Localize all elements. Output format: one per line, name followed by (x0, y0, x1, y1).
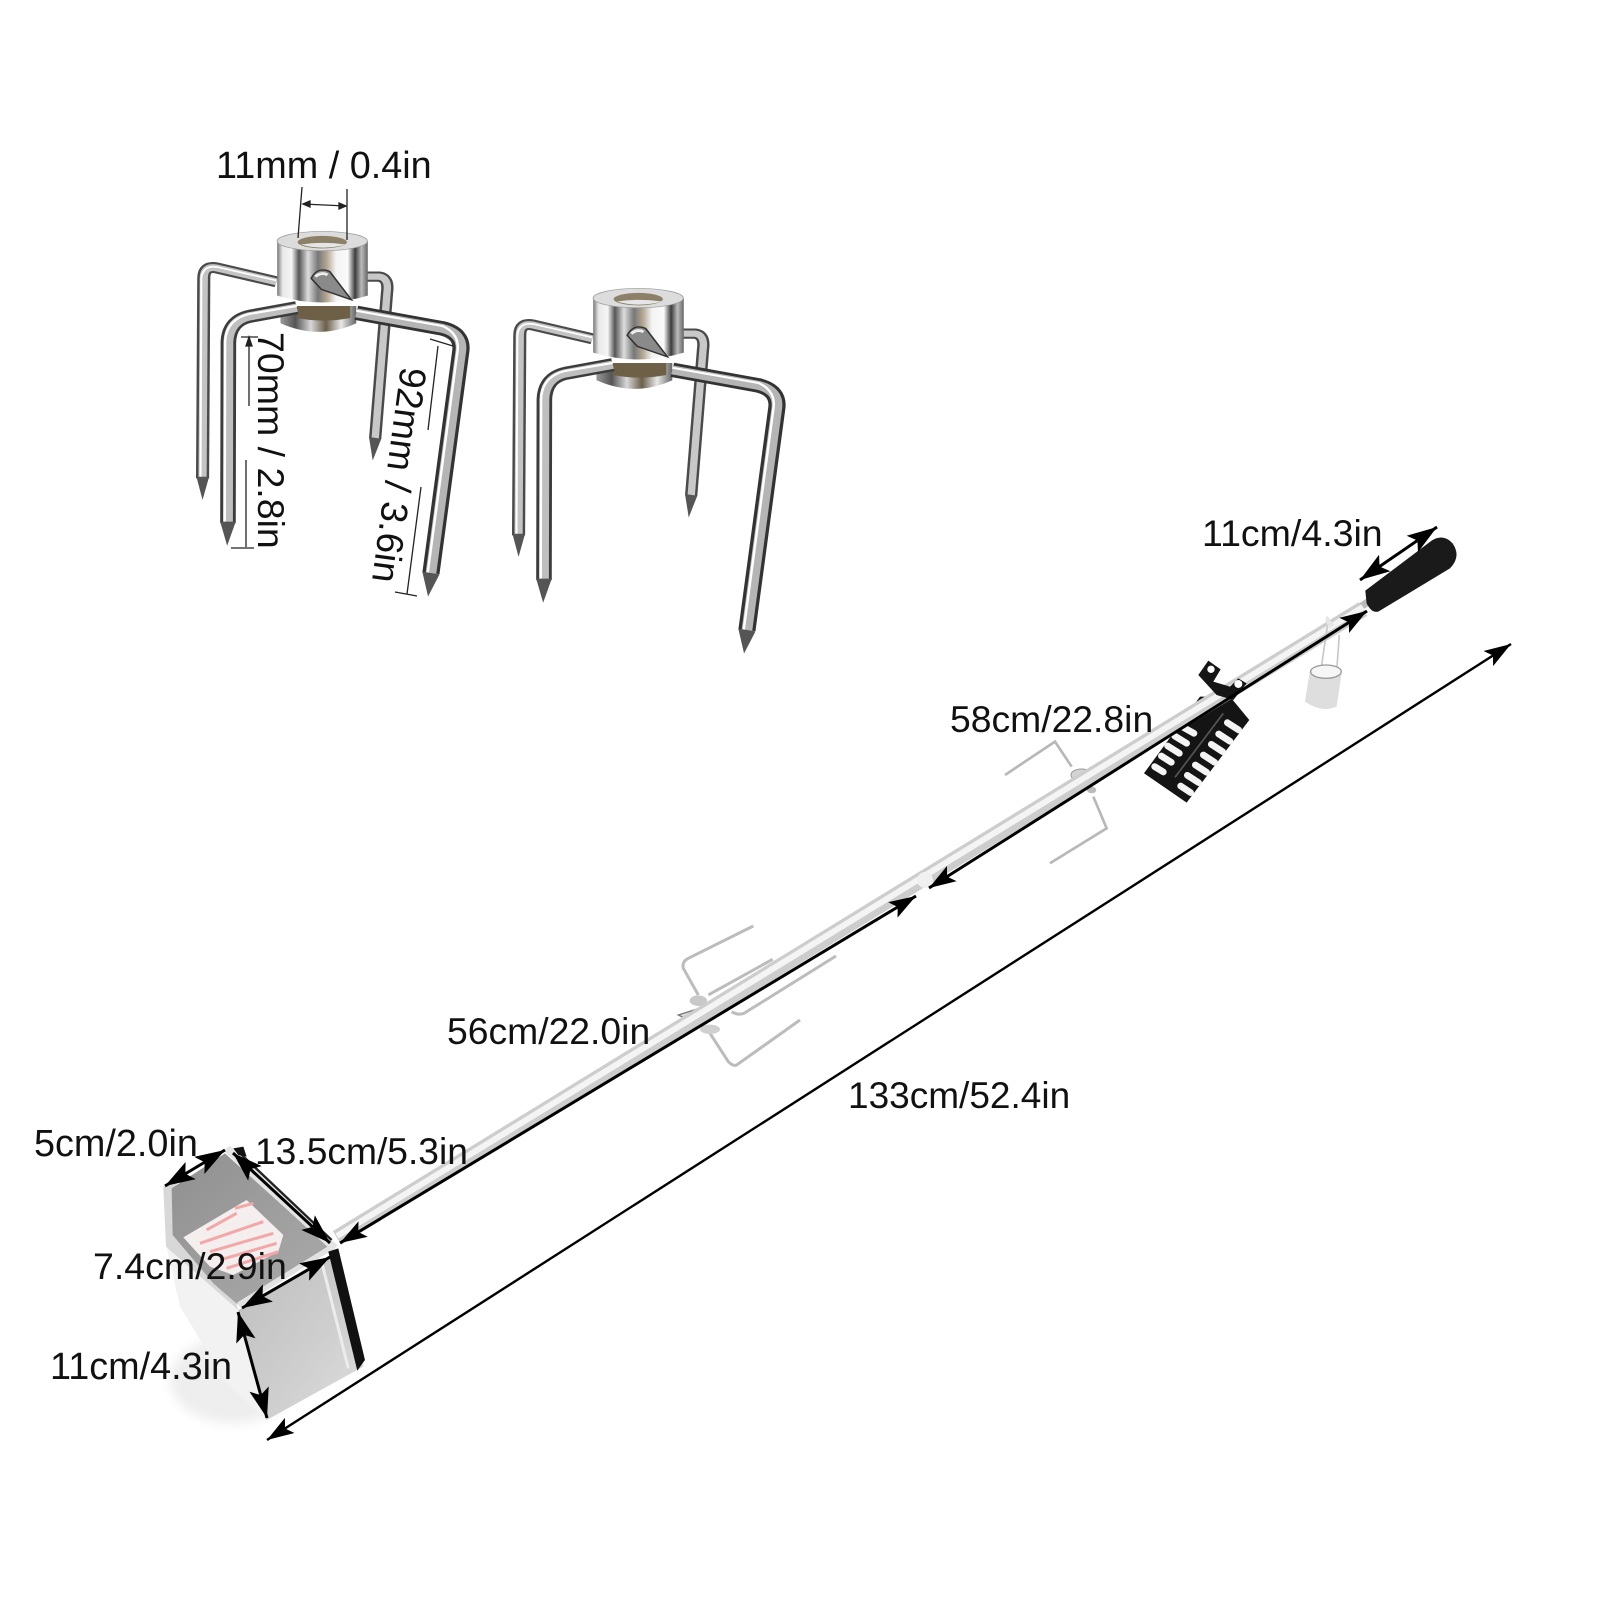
small fork lower (678, 926, 836, 1065)
right fork (512, 288, 777, 653)
short prong dimension lines (231, 337, 258, 548)
motor box (163, 1147, 365, 1423)
long prong dimension lines (395, 339, 453, 596)
fork pair with dimensions (196, 145, 777, 653)
top rim (227, 1148, 335, 1248)
short prong label: 70mm / 2.8in (250, 332, 292, 549)
label: box height: 11cm/4.3in (50, 1346, 232, 1388)
label: lower rod length: 56cm/22.0in (447, 1010, 650, 1052)
hanging weight (1305, 615, 1342, 709)
grate plate (1144, 697, 1249, 803)
rod (337, 609, 1363, 1238)
rod section arrow upper (929, 611, 1367, 888)
handle (1347, 538, 1457, 617)
left face (167, 1247, 267, 1420)
label: box length: 13.5cm/5.3in (255, 1130, 468, 1172)
box shadow (170, 1337, 297, 1423)
label: upper rod length: 58cm/22.8in (950, 698, 1153, 740)
label: box depth: 5cm/2.0in (34, 1123, 198, 1165)
box height arrow (238, 1312, 267, 1418)
rotisserie spit rod (337, 607, 1363, 1238)
label: box width: 7.4cm/2.9in (93, 1245, 287, 1287)
box length arrow (233, 1153, 330, 1243)
left fork (196, 231, 461, 596)
handle arrow (1360, 527, 1437, 580)
warning label (183, 1200, 283, 1275)
box depth arrow (165, 1150, 225, 1186)
rod joint (917, 872, 933, 888)
side flange (163, 1183, 238, 1310)
bore dimension lines (298, 187, 347, 240)
label: handle length: 11cm/4.3in (1202, 512, 1383, 554)
box width arrow (242, 1257, 330, 1308)
bracket (1198, 661, 1247, 700)
top panel (172, 1153, 330, 1305)
rod section arrow lower (340, 896, 916, 1243)
small fork upper (1005, 742, 1107, 863)
label: total length: 133cm/52.4in (848, 1075, 1070, 1116)
long prong label: 92mm / 3.6in (364, 365, 435, 585)
rod highlight (337, 607, 1363, 1236)
front face (238, 1257, 363, 1420)
bore label: 11mm / 0.4in (216, 145, 432, 187)
dark edge strip (328, 1248, 365, 1371)
long dimension arrow (267, 644, 1511, 1440)
